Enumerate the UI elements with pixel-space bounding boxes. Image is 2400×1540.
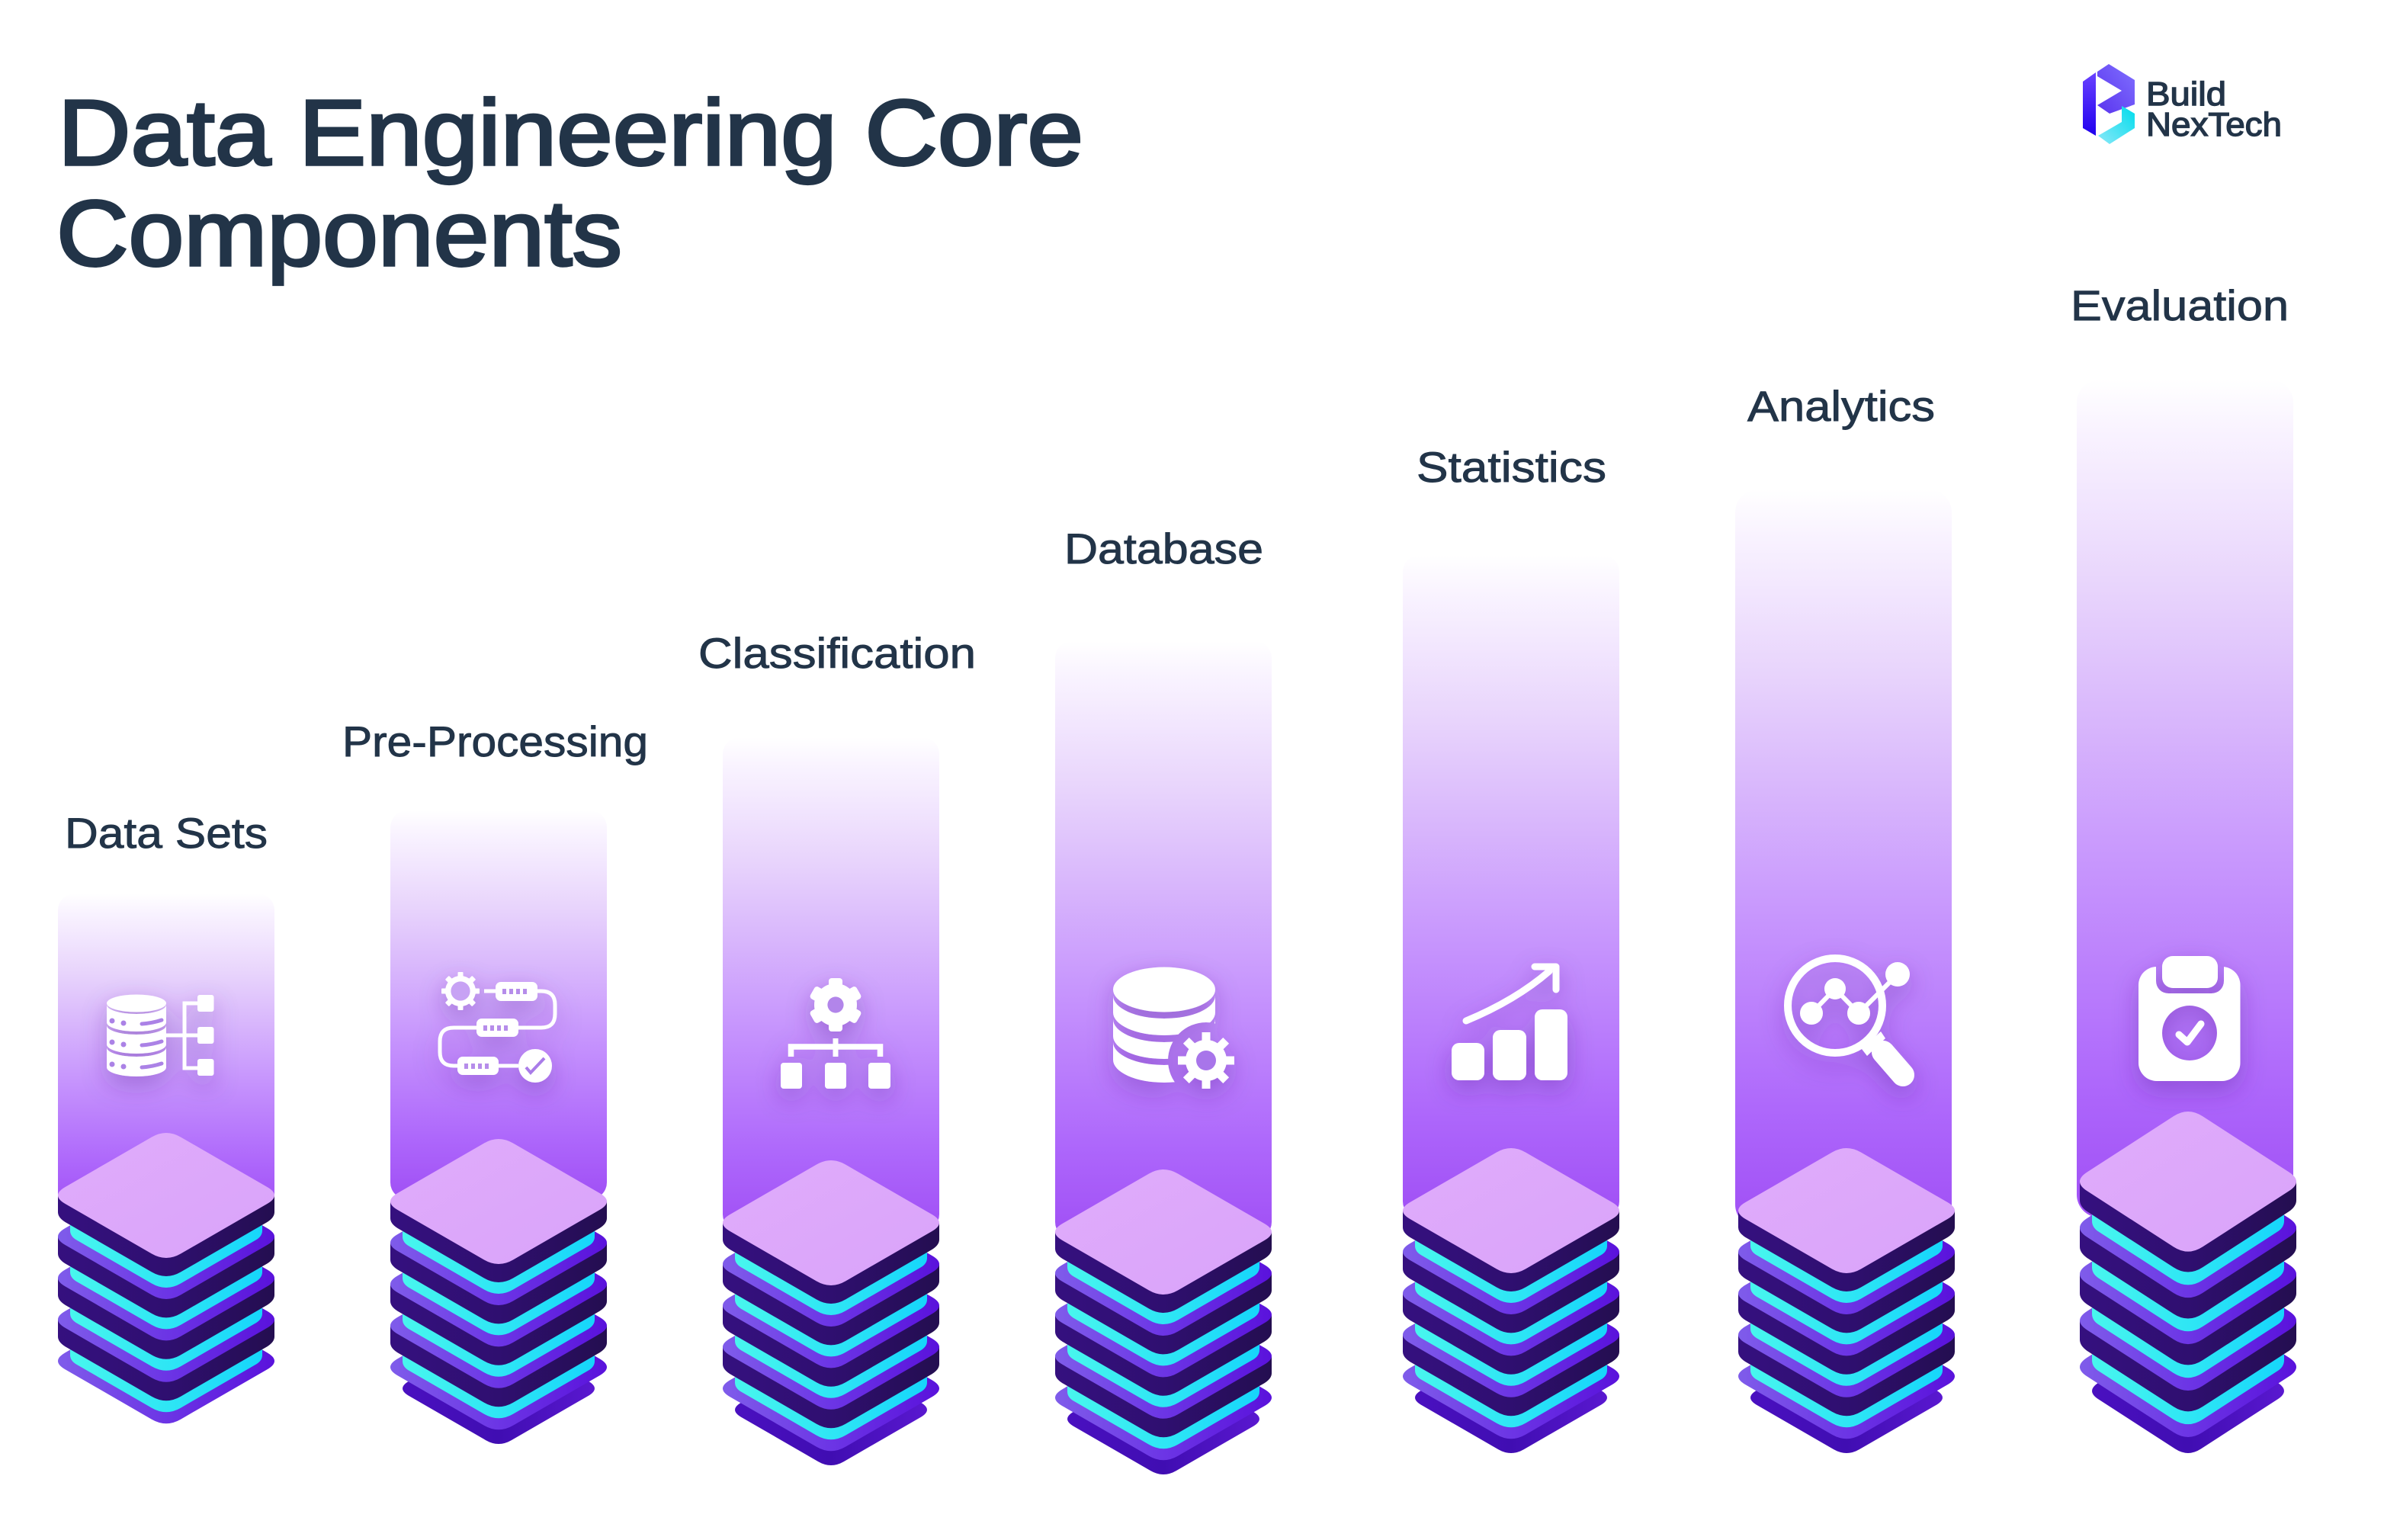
icon: growth chart bbox=[1452, 967, 1567, 1080]
icon: database gear bbox=[1113, 967, 1234, 1089]
icon: hexagon B mark bbox=[2083, 64, 2135, 144]
bar bbox=[1735, 489, 1952, 1227]
server stack bbox=[1738, 1148, 1955, 1453]
icon: clipboard check bbox=[2139, 956, 2240, 1081]
label: Classification: Classification bbox=[698, 629, 976, 677]
icon: magnifier analytics bbox=[1788, 958, 1910, 1075]
logo wordmark: Build bbox=[2146, 75, 2226, 113]
label: Statistics: Statistics bbox=[1417, 443, 1606, 491]
logo wordmark: NexTech bbox=[2146, 106, 2282, 143]
column: Classification bbox=[698, 629, 976, 1465]
label: Evaluation: Evaluation bbox=[2071, 281, 2289, 329]
server stack bbox=[723, 1160, 939, 1465]
icon: database tree bbox=[107, 994, 213, 1076]
title bbox=[56, 81, 1083, 285]
logo wordmark bbox=[2146, 75, 2282, 143]
bar bbox=[723, 737, 939, 1231]
bar bbox=[390, 810, 607, 1199]
column: Evaluation bbox=[2071, 281, 2296, 1453]
column: Database bbox=[1055, 525, 1272, 1474]
bar bbox=[2077, 380, 2293, 1218]
bar bbox=[1055, 641, 1272, 1239]
server stack bbox=[390, 1139, 607, 1444]
logo: Build NexTech bbox=[2083, 64, 2282, 144]
label: Database: Database bbox=[1064, 525, 1263, 573]
column: Data Sets bbox=[58, 809, 274, 1423]
icon: gear hierarchy bbox=[781, 978, 890, 1089]
column: Analytics bbox=[1735, 382, 1955, 1453]
bar bbox=[58, 894, 274, 1212]
label: Analytics: Analytics bbox=[1747, 382, 1935, 430]
server stack bbox=[1055, 1169, 1272, 1474]
server stack bbox=[1403, 1148, 1619, 1453]
bar bbox=[1403, 555, 1619, 1218]
column: Pre-Processing bbox=[342, 717, 648, 1444]
title: Components bbox=[56, 181, 622, 285]
column: Statistics bbox=[1403, 443, 1619, 1453]
server stack bbox=[2080, 1112, 2296, 1453]
label: Data Sets: Data Sets bbox=[65, 809, 268, 857]
icon: process flow bbox=[440, 972, 555, 1083]
server stack bbox=[58, 1133, 274, 1423]
title: Data Engineering Core bbox=[58, 81, 1083, 184]
label: Pre-Processing: Pre-Processing bbox=[342, 717, 648, 765]
